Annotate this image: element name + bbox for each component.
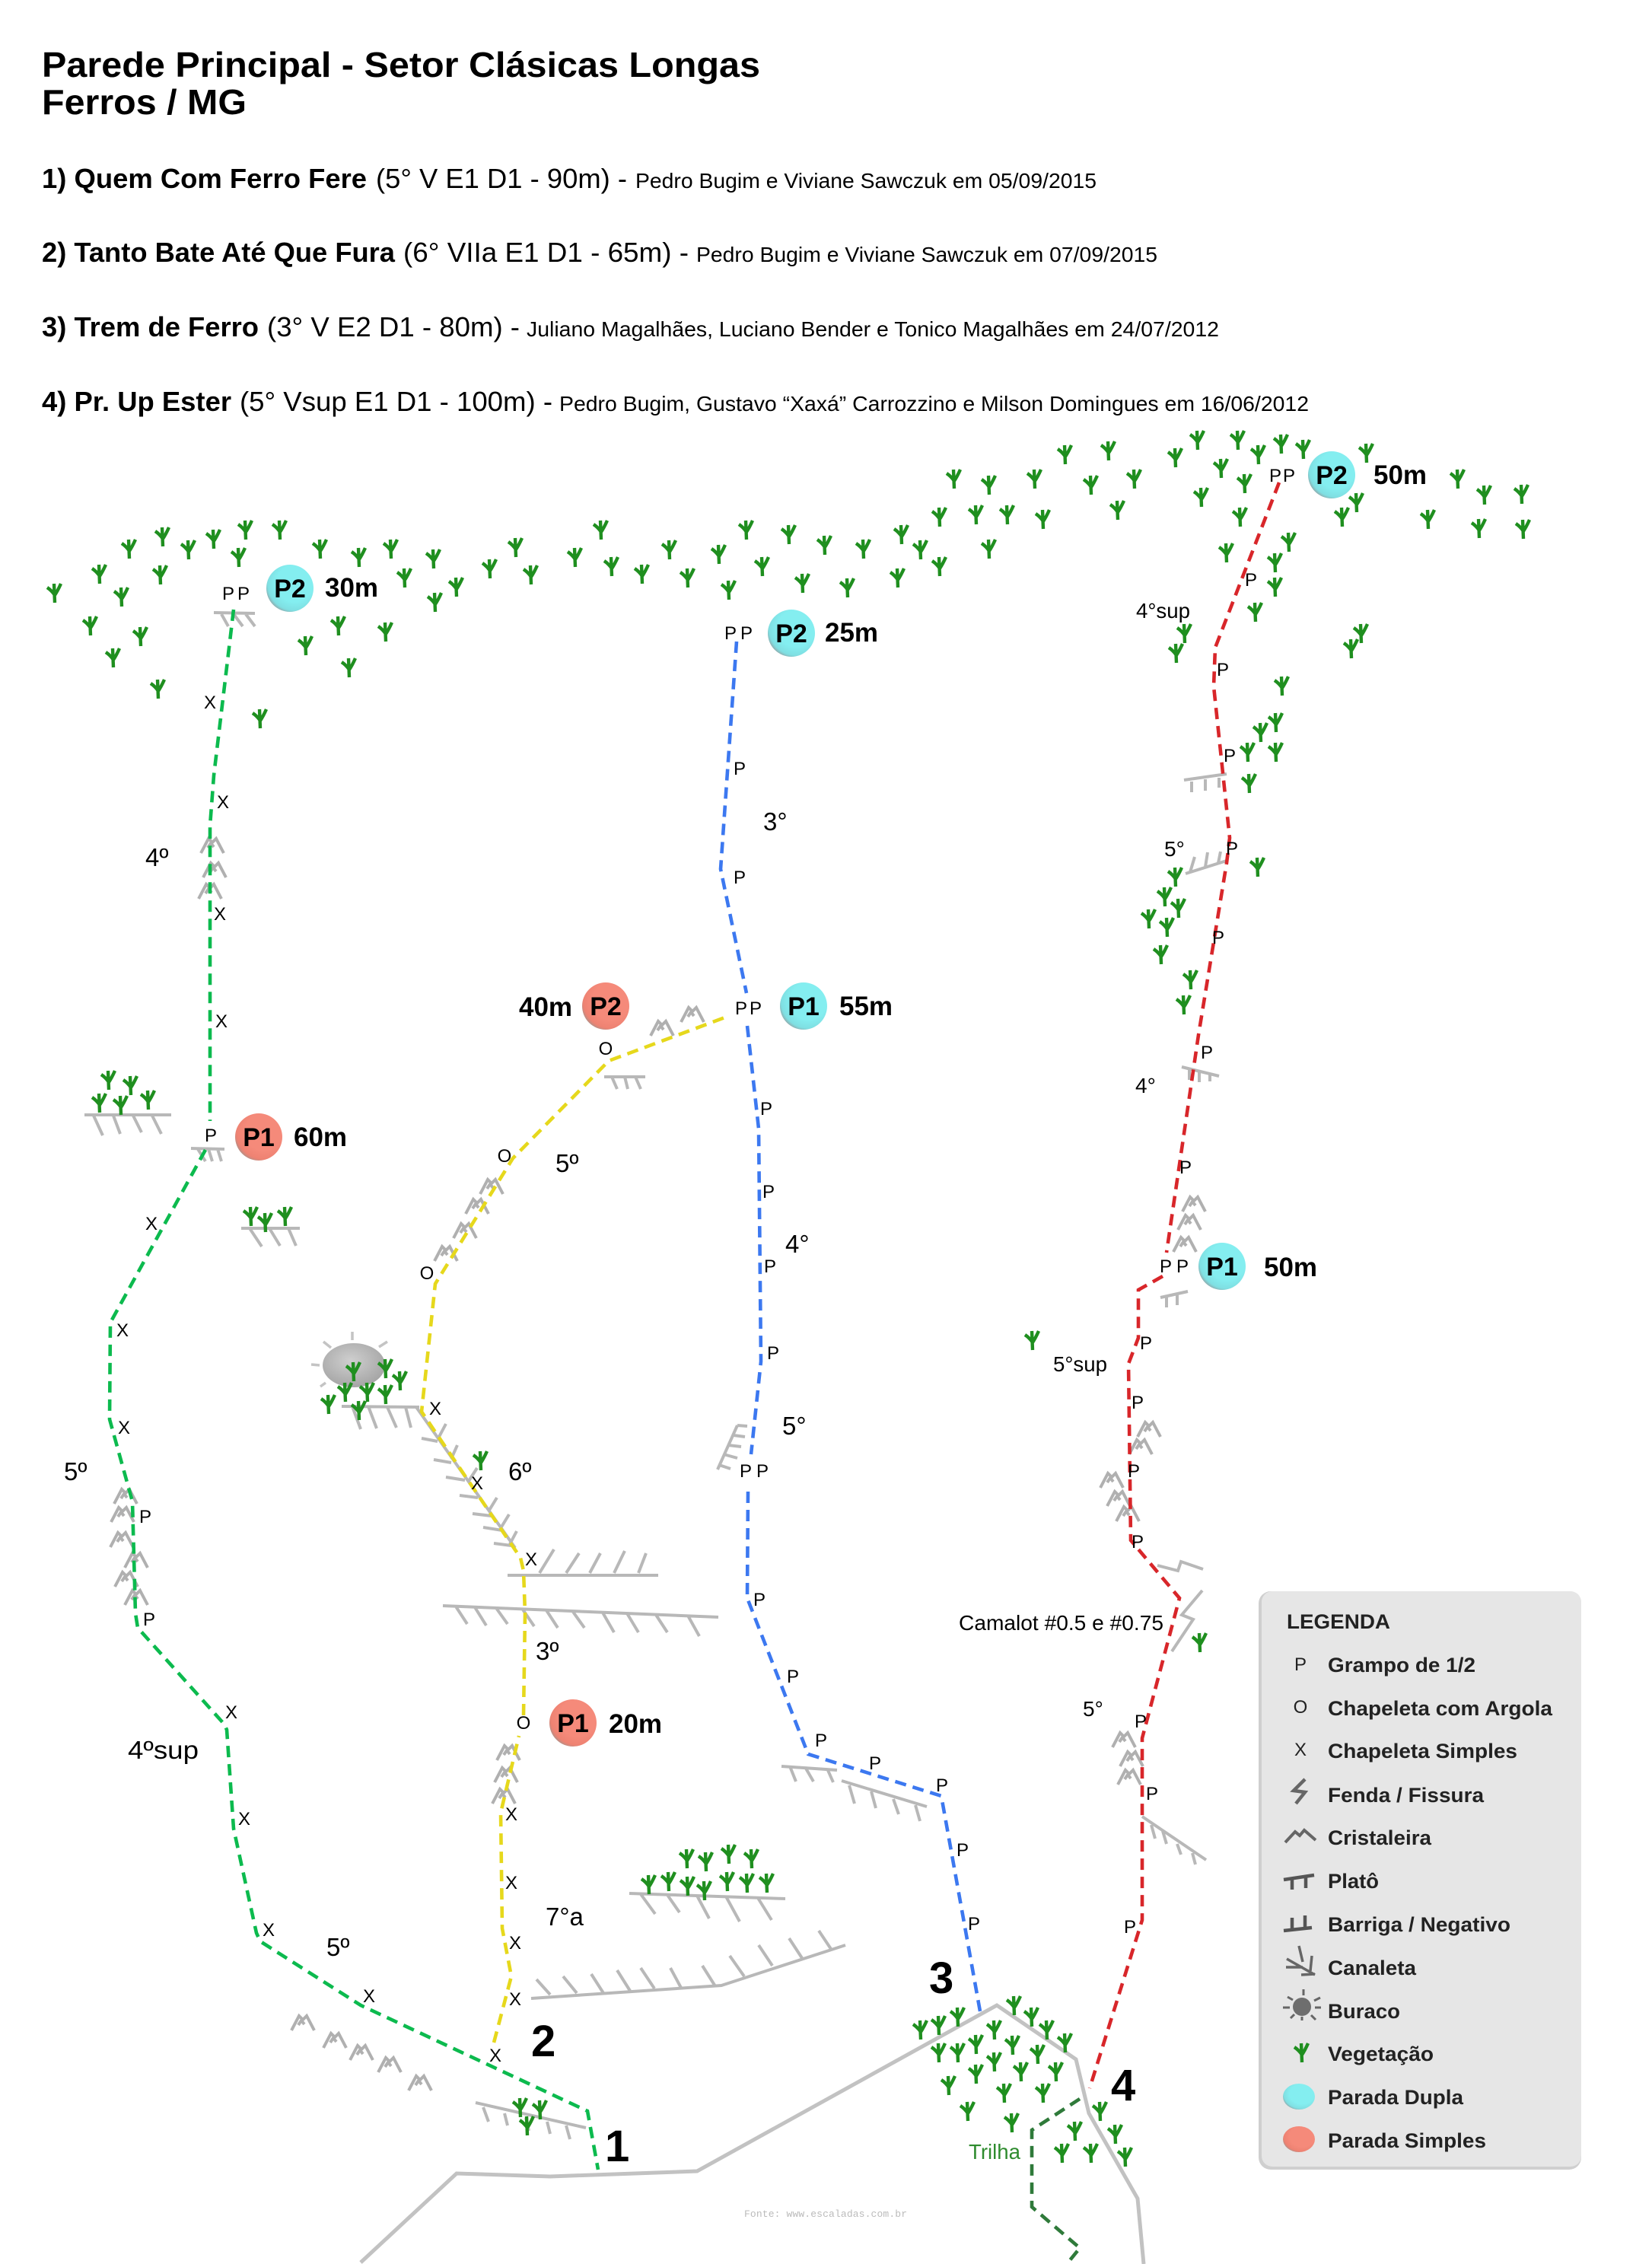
grade labels: 5° xyxy=(1164,837,1185,861)
route 3: blue: P xyxy=(740,1461,752,1482)
route 4: red: P xyxy=(1212,928,1224,948)
route 4: red: P xyxy=(1132,1393,1144,1413)
stop: route 4 P2: P2 xyxy=(1316,461,1348,490)
legend item: simple anchor: Chapeleta Simples xyxy=(1328,1740,1517,1762)
legend item: overhang: Barriga / Negativo xyxy=(1328,1913,1510,1936)
route 4: red xyxy=(1090,466,1295,2088)
route 2: yellow xyxy=(420,1016,729,2066)
stop: route 3 P1: P1 xyxy=(788,992,820,1021)
route 1: green: X xyxy=(263,1920,275,1941)
stop: route 3 P1 xyxy=(780,982,893,1030)
route 3 description: Juliano Magalhães, Luciano Bender e Tonico Magalhães em 24/07/2012 xyxy=(527,317,1219,341)
stop: route 1 P2 xyxy=(266,565,378,612)
route 4 description: (5° Vsup E1 D1 - 100m) - xyxy=(240,386,552,417)
stop: route 1 P1 xyxy=(235,1113,347,1161)
legend item: bolt P: P xyxy=(1294,1654,1307,1675)
belay stops xyxy=(235,451,1427,1747)
stop: route 2 P1 xyxy=(549,1699,662,1747)
route 4 description xyxy=(42,386,1309,417)
stop: route 4 P1 xyxy=(1198,1243,1317,1290)
stop: route 3 P1: 55m xyxy=(839,992,893,1021)
route 4: red: P xyxy=(1128,1461,1140,1482)
route 2: yellow: X xyxy=(489,2046,501,2066)
stop: route 4 P1: 50m xyxy=(1264,1253,1317,1282)
route 4: red: P xyxy=(1217,660,1229,680)
source credit: Fonte: www.escaladas.com.br xyxy=(744,2208,907,2220)
route 1: green: X xyxy=(145,1214,158,1234)
title xyxy=(42,45,760,122)
route 2: yellow: X xyxy=(509,1989,521,2010)
route 3: blue: P xyxy=(936,1775,948,1796)
legend item: single stop xyxy=(1283,2126,1486,2152)
route 4: red: P xyxy=(1245,570,1257,591)
route 4: red: P xyxy=(1269,466,1281,486)
route 3: blue: P xyxy=(787,1667,799,1687)
grade labels: 5°sup xyxy=(1053,1352,1107,1376)
route 3: blue: P xyxy=(740,623,753,644)
grade labels: 6º xyxy=(508,1457,531,1485)
route 2: yellow: O xyxy=(599,1039,613,1059)
route 4: red: P xyxy=(1135,1712,1147,1732)
route 3: blue: P xyxy=(762,1182,775,1202)
legend item: hole xyxy=(1283,1989,1400,2023)
grade labels: Camalot #0.5 e #0.75 xyxy=(959,1611,1163,1635)
route start numbers: 2 xyxy=(531,2017,555,2066)
legend item: plateau xyxy=(1284,1870,1379,1893)
route 1: green: X xyxy=(215,1011,228,1032)
legend item: channel: Canaleta xyxy=(1328,1957,1417,1979)
route 2: yellow: X xyxy=(505,1873,517,1893)
route 1: green: X xyxy=(363,1986,375,2007)
stop: route 3 P2 xyxy=(768,610,878,657)
legend item: crystal xyxy=(1285,1826,1432,1849)
route 3: blue xyxy=(721,623,980,2011)
grade labels: 5º xyxy=(326,1933,349,1961)
route 1: green: P xyxy=(143,1610,155,1630)
stop: route 2 P1: P1 xyxy=(557,1709,589,1738)
route 3: blue: P xyxy=(750,998,762,1019)
route 3: blue: P xyxy=(756,1461,769,1482)
route 1: green: P xyxy=(237,584,250,604)
legend item: crack: Fenda / Fissura xyxy=(1328,1784,1485,1807)
stop: route 4 P1: P1 xyxy=(1206,1253,1238,1282)
grade labels: 4ºsup xyxy=(128,1736,199,1764)
stop: route 4 P2 xyxy=(1308,451,1427,498)
grade labels: 5° xyxy=(1083,1697,1103,1721)
grade labels: 4º xyxy=(145,843,168,871)
route 4: red: P xyxy=(1176,1256,1189,1277)
route 4: red: P xyxy=(1140,1333,1152,1354)
route start numbers: 3 xyxy=(929,1954,953,2003)
route 2: yellow: X xyxy=(471,1473,483,1494)
route 3: blue: P xyxy=(753,1590,766,1610)
grade labels: 3º xyxy=(536,1637,559,1665)
legend item: single stop: Parada Simples xyxy=(1328,2129,1486,2152)
route 2: yellow: X xyxy=(505,1804,517,1825)
grade labels: 5º xyxy=(64,1457,87,1485)
grade labels: 4° xyxy=(785,1230,810,1258)
grade labels: 5° xyxy=(782,1412,807,1440)
approach trail xyxy=(969,2099,1080,2264)
legend item: double stop xyxy=(1283,2084,1464,2110)
route 1 description xyxy=(42,163,1097,194)
route 3: blue: P xyxy=(767,1343,779,1364)
route 3: blue: P xyxy=(968,1914,980,1934)
route 3: blue: P xyxy=(957,1840,969,1861)
route 4: red: P xyxy=(1124,1917,1136,1938)
route list xyxy=(42,163,1309,417)
grade labels: 4° xyxy=(1135,1074,1156,1097)
legend item: bolt P: Grampo de 1/2 xyxy=(1328,1654,1475,1677)
stop: route 4 P2: 50m xyxy=(1373,460,1427,490)
route 4: red: P xyxy=(1132,1532,1144,1552)
grade labels: 7°a xyxy=(546,1903,584,1931)
legend item: double stop: Parada Dupla xyxy=(1328,2086,1464,2109)
legend item: plateau: Platô xyxy=(1328,1870,1379,1893)
route 2 description: (6° VIIa E1 D1 - 65m) - xyxy=(403,237,689,268)
vegetation xyxy=(47,431,1529,2167)
route start numbers: 4 xyxy=(1111,2061,1135,2110)
route 2: yellow: O xyxy=(498,1146,511,1167)
route 2: yellow: X xyxy=(429,1399,441,1419)
route 3: blue: P xyxy=(734,759,746,779)
stop: route 1 P2: P2 xyxy=(274,575,306,603)
route start numbers xyxy=(531,1954,1135,2171)
stop: route 2 P2: P2 xyxy=(590,992,622,1021)
route 4: red: P xyxy=(1226,839,1238,859)
legend panel xyxy=(1259,1591,1581,2170)
legend item: ring anchor: O xyxy=(1294,1697,1307,1718)
route 3: blue: P xyxy=(760,1099,772,1119)
stop: route 1 P1: P1 xyxy=(243,1123,275,1152)
route 1: green: X xyxy=(225,1702,237,1723)
stop: route 1 P2: 30m xyxy=(325,573,378,603)
route 2: yellow: X xyxy=(525,1549,537,1570)
route 2 description: 2) Tanto Bate Até Que Fura xyxy=(42,237,396,268)
route 2 description: Pedro Bugim e Viviane Sawczuk em 07/09/2015 xyxy=(696,243,1157,266)
rock features: plateaus, channels, cracks xyxy=(84,613,1227,2139)
route 1 description: (5° V E1 D1 - 90m) - xyxy=(376,163,627,194)
route 1: green: P xyxy=(222,584,234,604)
route 4: red: P xyxy=(1283,466,1295,486)
route 2: yellow: O xyxy=(517,1713,530,1734)
legend item: hole: Buraco xyxy=(1328,2000,1400,2023)
route 1: green: X xyxy=(214,904,226,925)
route 3: blue: P xyxy=(764,1256,776,1277)
route 4: red: P xyxy=(1224,746,1236,766)
route 3 description: 3) Trem de Ferro xyxy=(42,311,259,342)
cracks xyxy=(1157,1562,1203,1571)
legend item: vegetation: Vegetação xyxy=(1328,2043,1434,2065)
legend item: ring anchor: Chapeleta com Argola xyxy=(1328,1697,1553,1720)
channel xyxy=(416,1407,517,1548)
route 1: green: X xyxy=(204,693,216,713)
legend item: simple anchor: X xyxy=(1294,1740,1307,1760)
route 4: red: P xyxy=(1160,1256,1172,1277)
route 4: red: P xyxy=(1201,1043,1213,1063)
route 2 description xyxy=(42,237,1157,268)
icon: hole xyxy=(311,1332,387,1387)
route 1 description: 1) Quem Com Ferro Fere xyxy=(42,163,367,194)
route start numbers: 1 xyxy=(605,2122,629,2171)
route 1: green: P xyxy=(205,1126,217,1146)
route 1: green: X xyxy=(217,792,229,813)
route 4: red: P xyxy=(1146,1784,1158,1804)
legend item: crystal: Cristaleira xyxy=(1328,1826,1432,1849)
grade labels: 5º xyxy=(555,1149,578,1177)
stop: route 3 P2: P2 xyxy=(775,619,807,648)
grade labels xyxy=(64,599,1190,1961)
stop: route 1 P1: 60m xyxy=(294,1122,347,1152)
route 3 description: (3° V E2 D1 - 80m) - xyxy=(267,311,520,342)
route 2: yellow: O xyxy=(420,1263,434,1284)
route 3: blue: P xyxy=(724,623,737,644)
stop: route 2 P1: 20m xyxy=(609,1709,662,1739)
stop: route 2 P2 xyxy=(519,982,629,1030)
title: Parede Principal - Setor Clásicas Longas xyxy=(42,45,760,84)
route 4 description: 4) Pr. Up Ester xyxy=(42,386,231,417)
crystal formations xyxy=(110,839,1205,2090)
route 1: green: X xyxy=(116,1320,129,1341)
route 3 description xyxy=(42,311,1219,342)
title: Ferros / MG xyxy=(42,82,247,122)
route 1: green xyxy=(110,584,598,2170)
route 3: blue: P xyxy=(815,1731,827,1751)
legend item: crack xyxy=(1294,1779,1485,1807)
route 1: green: X xyxy=(238,1809,250,1829)
grade labels: 4°sup xyxy=(1136,599,1190,623)
approach trail: Trilha xyxy=(969,2140,1020,2164)
route 4: red: P xyxy=(1179,1157,1192,1178)
route 1: green: X xyxy=(118,1418,130,1438)
route 2: yellow: X xyxy=(509,1933,521,1954)
route 4 description: Pedro Bugim, Gustavo “Xaxá” Carrozzino e Milson Domingues em 16/06/2012 xyxy=(559,392,1309,416)
stop: route 2 P2: 40m xyxy=(519,992,572,1022)
terrain base line xyxy=(361,2005,1144,2264)
legend item: channel xyxy=(1286,1946,1417,1979)
grade labels: 3° xyxy=(763,807,788,836)
route 3: blue: P xyxy=(735,998,747,1019)
route 1 description: Pedro Bugim e Viviane Sawczuk em 05/09/2015 xyxy=(635,169,1097,193)
route 3: blue: P xyxy=(734,868,746,888)
route 3: blue: P xyxy=(869,1753,881,1774)
legend heading: LEGENDA xyxy=(1287,1610,1390,1633)
route 1: green: P xyxy=(139,1507,151,1527)
stop: route 3 P2: 25m xyxy=(825,618,878,648)
